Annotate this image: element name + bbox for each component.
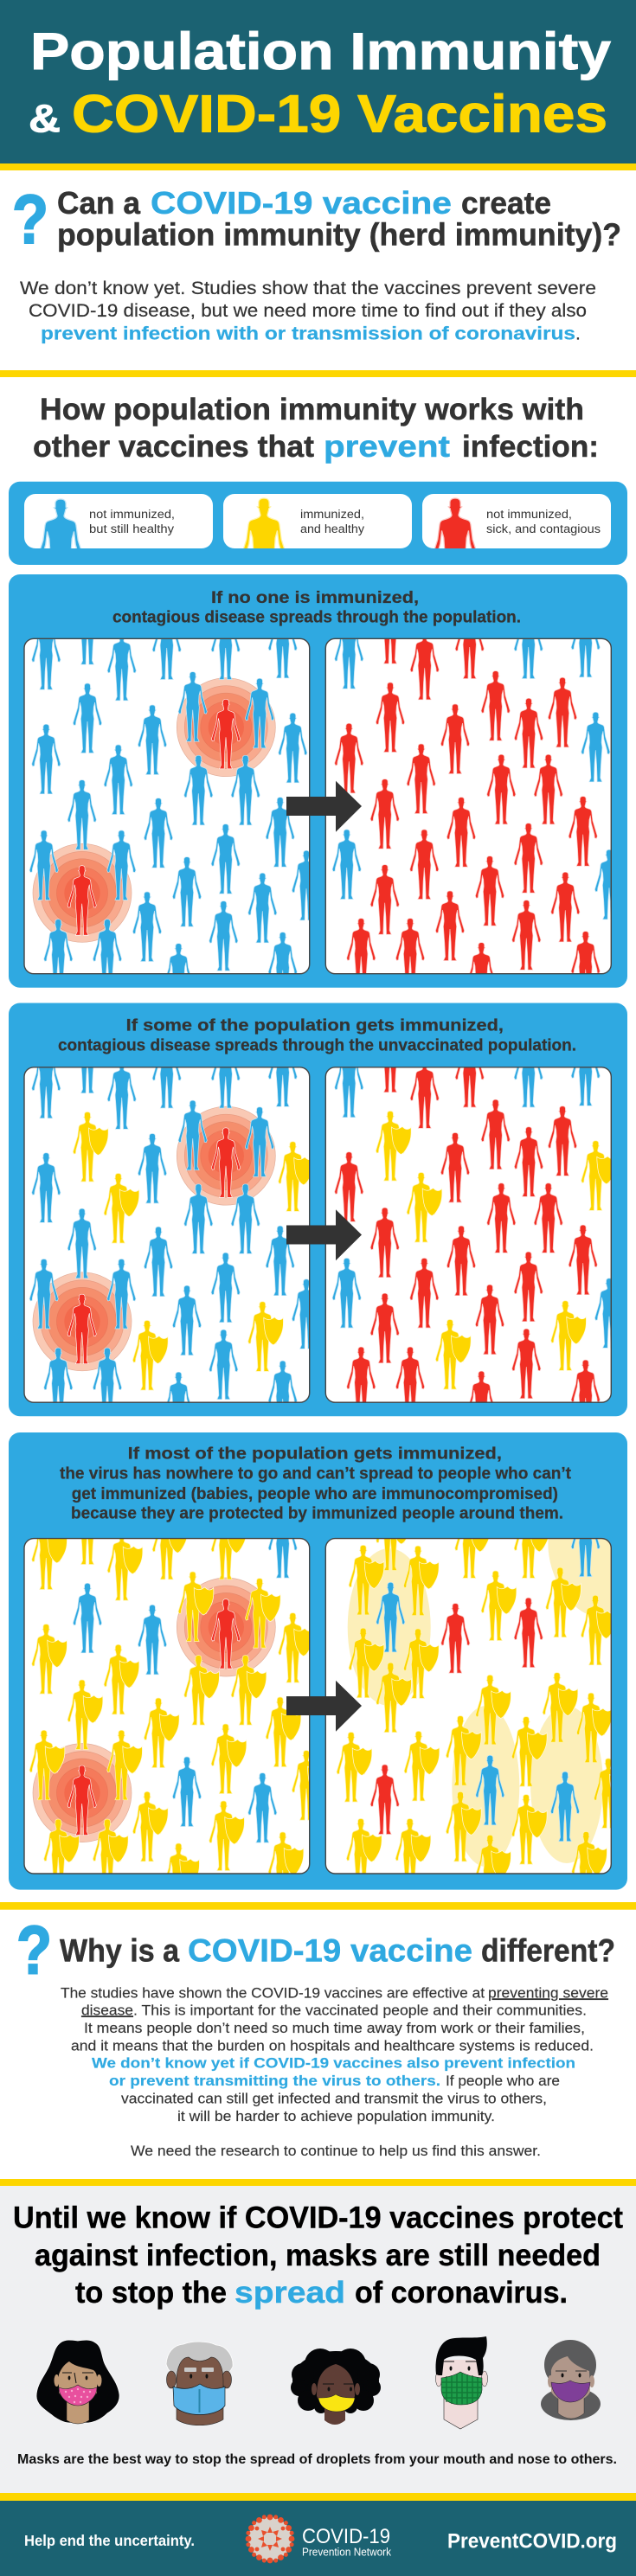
face: woman with pink mask	[36, 2340, 119, 2424]
ampersand: &	[29, 97, 61, 141]
explanation paragraph: It means people don’t need so much time away from work or their families,	[84, 2020, 585, 2036]
icon: question mark: ?	[12, 181, 48, 258]
header banner	[0, 0, 636, 170]
section: why is a covid vaccine different	[16, 1912, 615, 2159]
title line 1: Population Immunity	[30, 22, 611, 80]
question heading: population immunity (herd immunity)?	[57, 216, 621, 252]
answer paragraph: .	[575, 324, 581, 344]
explanation paragraph	[61, 1984, 608, 2159]
panel 3 heading: get immunized (babies, people who are immunocompromised)	[72, 1485, 558, 1503]
masks heading: against infection, masks are still needed	[35, 2239, 601, 2272]
answer paragraph: We don’t know yet. Studies show that the vaccines prevent severe	[20, 278, 596, 298]
icon: question mark: ?	[16, 1912, 52, 1989]
heading: how population immunity works: other vaccines that	[33, 429, 314, 464]
section: can a vaccine create immunity	[12, 181, 621, 344]
explanation paragraph: disease	[81, 2002, 133, 2018]
face: older woman with purple mask	[541, 2340, 601, 2420]
panel: most immunized	[9, 1432, 636, 1913]
question heading: Can a	[57, 185, 141, 221]
heading: how population immunity works: How population immunity works with	[40, 392, 584, 426]
logo text: COVID-19	[302, 2525, 390, 2548]
scene: after, most people sick	[325, 638, 612, 974]
panel 2 heading: contagious disease spreads through the unvaccinated population.	[58, 1036, 576, 1054]
explanation paragraph: The studies have shown the COVID-19 vaccines are effective at	[61, 1984, 485, 2001]
section heading: different?	[481, 1932, 615, 1968]
masks heading: Until we know if COVID-19 vaccines protect	[13, 2201, 623, 2235]
section: masks	[0, 2186, 636, 2493]
website: PreventCOVID.org	[447, 2530, 617, 2554]
face: man with green plaid mask	[436, 2336, 488, 2429]
panel: no one immunized	[9, 574, 627, 1013]
panel 3 heading	[60, 1445, 572, 1522]
title line 2: COVID-19 Vaccines	[72, 85, 607, 144]
logo text: Prevention Network	[302, 2545, 391, 2558]
masks heading: of coronavirus.	[355, 2276, 568, 2310]
panel 3 heading: the virus has nowhere to go and can’t spread to people who can’t	[60, 1465, 572, 1483]
arrow: before to after	[286, 1681, 362, 1732]
legend item: sick: not immunized,	[486, 508, 572, 521]
panel 1 heading: contagious disease spreads through the population.	[112, 608, 521, 626]
section heading: COVID-19 vaccine	[188, 1932, 472, 1968]
heading: how population immunity works: infection:	[462, 429, 599, 464]
explanation paragraph: . This is important for the vaccinated people and their communities.	[133, 2002, 587, 2018]
tagline: Help end the uncertainty.	[24, 2532, 195, 2549]
explanation paragraph: and it means that the burden on hospitals and healthcare systems is reduced.	[71, 2037, 594, 2054]
face: woman with yellow mask	[291, 2349, 381, 2425]
panel: some immunized	[9, 1003, 627, 1442]
panel 1 heading	[112, 589, 521, 626]
protective halos	[348, 1539, 611, 1867]
legend item: not immunized, healthy: but still healthy	[89, 522, 174, 535]
panel: legend	[9, 481, 627, 565]
explanation paragraph: vaccinated can still get infected and transmit the virus to others,	[121, 2091, 547, 2107]
masks heading: to stop the	[75, 2276, 227, 2310]
section heading	[60, 1932, 615, 1968]
panel 3 heading: If most of the population gets immunized,	[128, 1445, 502, 1463]
panel 2 heading	[58, 1017, 576, 1054]
legend item: immunized	[223, 494, 412, 548]
scene: before, most people immunized with shields	[23, 1538, 310, 1874]
section heading: Why is a	[60, 1932, 180, 1968]
explanation paragraph: it will be harder to achieve population immunity.	[177, 2108, 495, 2124]
legend item: not immunized, healthy: not immunized,	[89, 508, 175, 521]
panel 1 heading: If no one is immunized,	[211, 589, 419, 607]
question heading: COVID-19 vaccine	[151, 185, 452, 221]
scene: before, two sick people among unimmunized	[23, 638, 310, 974]
legend item: sick	[422, 494, 611, 548]
explanation paragraph: We don’t know yet if COVID-19 vaccines also prevent infection	[92, 2055, 575, 2072]
answer paragraph: prevent infection with or transmission of coronavirus	[41, 324, 575, 344]
explanation paragraph: preventing severe	[488, 1984, 608, 2001]
explanation paragraph: We need the research to continue to help us find this answer.	[131, 2143, 541, 2159]
legend item: immunized: immunized,	[300, 508, 364, 521]
scene: after, unimmunized people protected by immunized neighbours	[325, 1538, 612, 1874]
answer paragraph	[20, 278, 596, 344]
heading: how population immunity works	[33, 392, 599, 464]
masks heading	[13, 2201, 623, 2310]
legend item: sick: sick, and contagious	[486, 522, 601, 535]
logo text	[302, 2525, 391, 2558]
heading: how population immunity works: prevent	[324, 429, 450, 464]
legend item: immunized: and healthy	[300, 522, 364, 535]
logo: coronavirus	[246, 2515, 294, 2563]
scene: before, some people immunized with shields	[23, 1067, 310, 1403]
answer paragraph: COVID-19 disease, but we need more time to find out if they also	[29, 300, 587, 321]
panel 2 heading: If some of the population gets immunized,	[126, 1017, 504, 1035]
arrow: before to after	[286, 781, 362, 832]
arrow: before to after	[286, 1209, 362, 1260]
question heading	[57, 185, 621, 252]
masks caption: Masks are the best way to stop the spread of droplets from your mouth and nose to others.	[17, 2452, 617, 2467]
footer	[0, 2501, 636, 2576]
scene: after, unvaccinated people sick	[325, 1067, 612, 1403]
explanation paragraph: If people who are	[446, 2073, 560, 2089]
question heading: create	[461, 185, 551, 221]
legend item: not immunized, healthy	[24, 494, 213, 548]
masks heading: spread	[234, 2276, 345, 2310]
panel 3 heading: because they are protected by immunized people around them.	[71, 1504, 563, 1522]
explanation paragraph: or prevent transmitting the virus to others.	[109, 2073, 440, 2089]
face: older man with blue mask	[166, 2342, 233, 2425]
